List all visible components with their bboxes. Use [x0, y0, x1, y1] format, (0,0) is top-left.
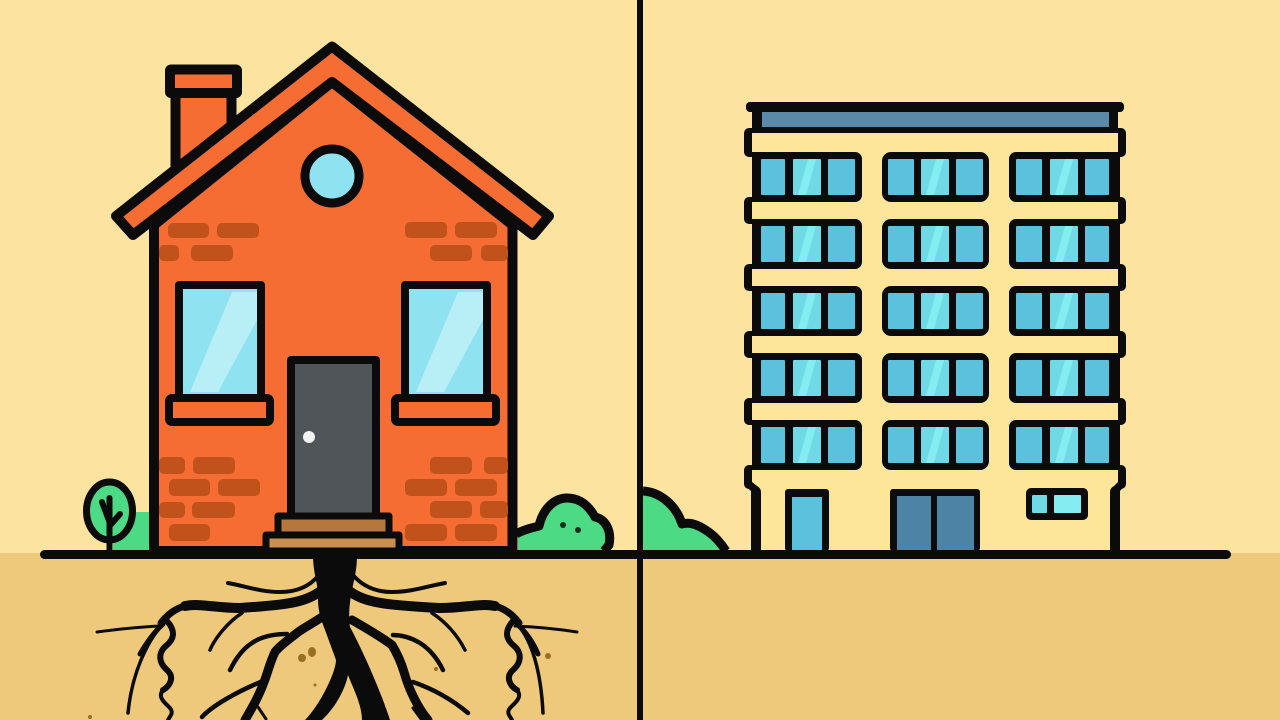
- windows row 3: [752, 286, 1120, 336]
- windows row 2: [752, 219, 1120, 269]
- bricks: [159, 222, 508, 541]
- small ground window: [1026, 488, 1088, 520]
- soil specks: [88, 647, 551, 719]
- windows row 4: [752, 353, 1120, 403]
- icon: bush right of divider: [643, 491, 726, 551]
- steps: [266, 516, 399, 551]
- center divider: [637, 0, 643, 720]
- panel: apartment building: [744, 102, 1126, 551]
- building body: [752, 127, 1118, 551]
- panel: house: [116, 46, 549, 551]
- ledge bumps: [744, 128, 1126, 489]
- lower walls: [745, 482, 1125, 551]
- house wall: [154, 82, 512, 551]
- main double door: [890, 489, 980, 551]
- left window: [169, 285, 270, 422]
- entrance door left: [785, 489, 829, 551]
- icon: chimney: [170, 70, 237, 178]
- round attic window: [305, 149, 359, 203]
- ground line: [40, 550, 1231, 559]
- roof: [116, 46, 549, 235]
- icon: small tree: [86, 482, 149, 550]
- windows row 5: [752, 420, 1120, 470]
- door: [291, 360, 376, 518]
- icon: tree roots: [97, 555, 577, 720]
- windows row 1: [752, 152, 1120, 202]
- right window: [395, 285, 496, 422]
- icon: bush left of divider: [516, 498, 610, 551]
- roof band: [746, 102, 1124, 133]
